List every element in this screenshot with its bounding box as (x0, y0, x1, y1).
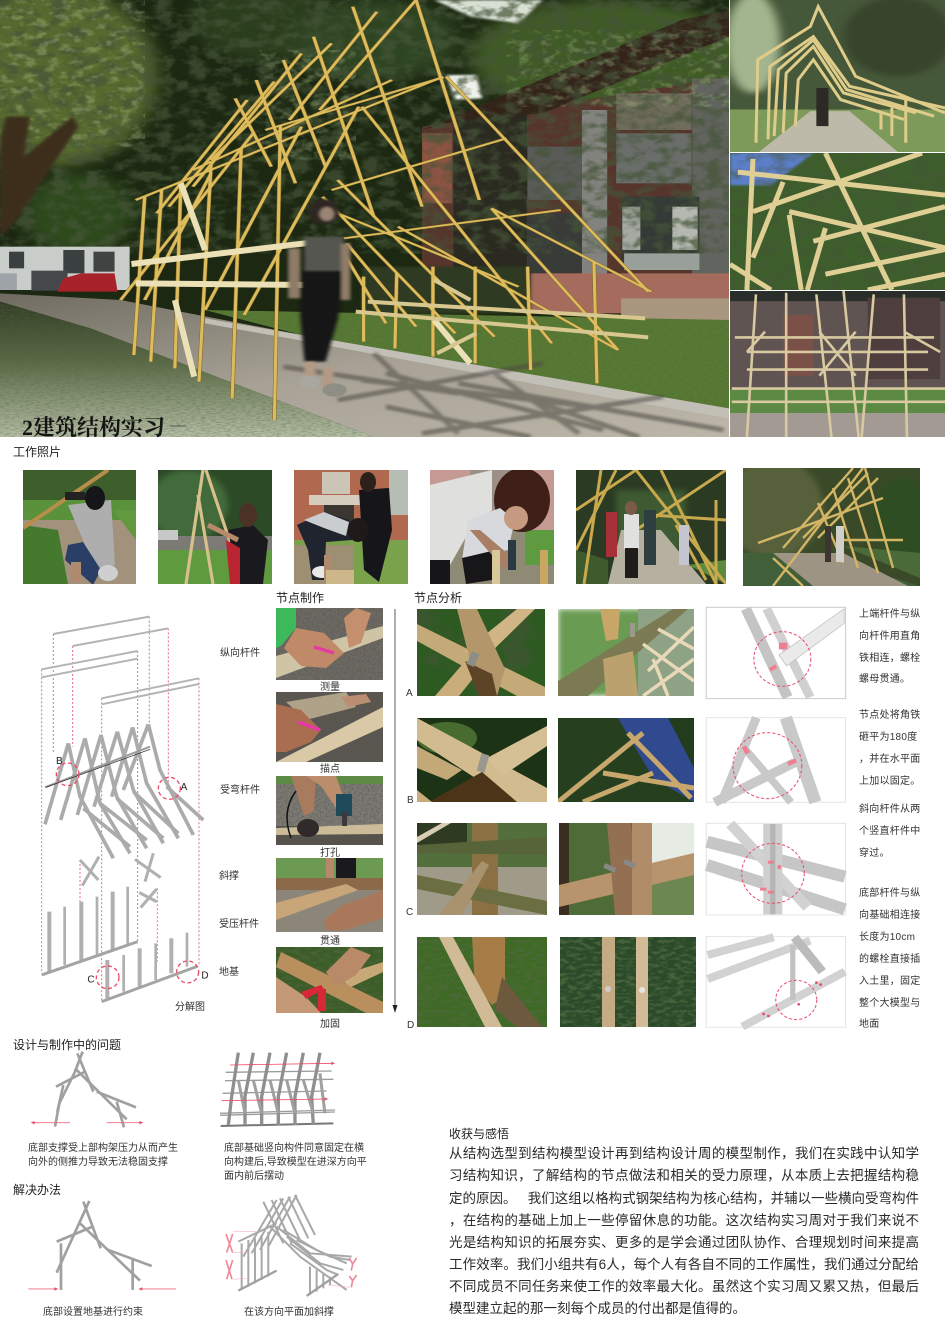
component labels: 地基 (219, 965, 239, 978)
reflections paragraph: 光是结构知识的拓展夯实、更多的是学会通过团队协作、合理规划时间来提高 (449, 1234, 919, 1250)
reflections paragraph: 从结构选型到结构模型设计再到结构设计周的模型制作，我们在实践中认知学 (449, 1145, 919, 1161)
reflections paragraph: 习结构知识，了解结构的节点做法和相关的受力原理，从本质上去把握结构稳 (449, 1167, 919, 1183)
problem diagram 2 (220, 1053, 335, 1126)
component labels: 受弯杆件 (220, 783, 260, 796)
caption: mark: 描点 (320, 762, 340, 775)
node notes: 斜向杆件从两 (859, 802, 920, 815)
heading: solutions: 解决办法 (13, 1182, 61, 1197)
node notes: 的螺栓直接插 (859, 952, 920, 965)
solution diagram 1 (28, 1201, 176, 1291)
reflections paragraph (449, 1145, 919, 1316)
solution text 1: 底部设置地基进行约束 (43, 1305, 143, 1318)
process arrow (392, 609, 398, 1013)
longitudinal bars (42, 617, 199, 704)
fabrication photo: drill (276, 776, 383, 845)
node D photo 2 (560, 937, 696, 1027)
left grass (0, 302, 374, 437)
problem text 2: 向构建后,导致模型在进深方向平 (224, 1155, 367, 1168)
photo: lattice from below (730, 153, 945, 290)
reflections paragraph: ，在结构的基础上加上一些停留休息的功能。这次结构实习周对于我们来说不 (449, 1212, 919, 1228)
caption: thread through: 贯通 (320, 935, 340, 947)
caption: measure: 测量 (320, 680, 340, 693)
component labels: 受压杆件 (219, 918, 259, 930)
work photo 6 (743, 468, 920, 586)
node C photo 2 (559, 823, 694, 915)
wood beams (121, 0, 651, 420)
exploded axonometric diagram: D (201, 971, 209, 982)
heading: problems: 设计与制作中的问题 (13, 1037, 121, 1052)
node A photo 1 (417, 609, 545, 696)
node notes: 整个大模型与 (859, 996, 920, 1009)
node notes: 底部杆件与纵 (859, 886, 920, 899)
node notes: 个竖直杆件中 (859, 824, 920, 837)
work photo 3 (294, 470, 408, 584)
component labels: 纵向杆件 (220, 646, 260, 659)
problem text 2: 底部基础竖向构件同意固定在横 (224, 1141, 364, 1154)
fabrication photo: measure (276, 608, 383, 680)
solution text 2: 在该方向平面加斜撑 (244, 1305, 334, 1318)
problem text 1 (28, 1141, 178, 1168)
node B drawing (706, 718, 846, 802)
heading: node fabrication: 节点制作 (276, 591, 324, 605)
node notes: 向基础相连接 (859, 908, 920, 921)
work photo 1 (23, 470, 136, 584)
node notes: 入土里，固定 (859, 974, 920, 987)
node letters: C (406, 907, 413, 918)
heading: node analysis: 节点分析 (414, 591, 462, 605)
solution diagram 2 (226, 1195, 357, 1296)
caption: drill: 打孔 (320, 846, 340, 859)
work photo 2 (158, 470, 272, 584)
reflections paragraph: 定的原因。 我们这组以格构式钢架结构为核心结构，并辅以一些横向受弯构件 (449, 1190, 919, 1206)
path (0, 293, 729, 437)
node notes: 砸平为180度 (859, 730, 917, 743)
heading: work photos: 工作照片 (13, 445, 61, 459)
bending rafters (45, 724, 203, 858)
fabrication photo: thread through (276, 858, 383, 932)
reflections paragraph: 模型建立起的那一刻每个成员的付出都是值得的。 (449, 1300, 746, 1316)
node notes: 节点处将角铁 (859, 708, 920, 721)
node notes: 长度为10cm (859, 930, 915, 943)
problem diagram 1 (31, 1052, 143, 1127)
reflections paragraph: 不同成员不同任务来使工作的效率最大化。虽然这个实习周又累又热，但最后 (449, 1278, 919, 1294)
compression posts (49, 892, 171, 998)
node B photo 1 (417, 718, 547, 802)
node letters: D (407, 1020, 414, 1031)
right grass (205, 310, 729, 408)
node notes (859, 607, 920, 1030)
problem text 2 (224, 1141, 367, 1182)
cast shadows (283, 353, 724, 437)
node C drawing (706, 823, 846, 915)
title: 2建筑结构实习 (22, 415, 165, 440)
node notes: 上端杆件与纵 (859, 607, 920, 620)
node letters (406, 688, 414, 1031)
heading: reflections: 收获与感悟 (449, 1126, 509, 1141)
node notes: 向杆件用直角 (859, 629, 920, 642)
photo: tunnel perspective (730, 0, 945, 152)
node notes: 螺母贯通。 (859, 673, 910, 685)
node letters: A (406, 688, 413, 699)
node notes: 穿过。 (859, 846, 890, 859)
node A photo 2 (558, 609, 694, 696)
exploded axonometric diagram: C (87, 975, 95, 986)
component labels: 斜撑 (219, 869, 239, 882)
exploded axonometric diagram (42, 617, 209, 1002)
node letters: B (407, 795, 414, 806)
fabrication photo: mark (276, 692, 383, 762)
red projection lines (42, 617, 199, 1000)
problem text 1: 向外的侧推力导致无法稳固支撑 (28, 1155, 168, 1168)
component labels: 分解图 (175, 1000, 205, 1013)
person (288, 199, 350, 397)
component labels (175, 646, 260, 1013)
node B photo 2 (558, 718, 694, 802)
node D photo 1 (417, 937, 547, 1027)
hero photo: wooden lattice tunnel (0, 0, 729, 437)
problem text 1: 底部支撑受上部构架压力从而产生 (28, 1141, 178, 1154)
exploded axonometric diagram: B (56, 756, 63, 767)
node notes: 铁相连，螺栓 (859, 651, 920, 664)
reflections paragraph: 工作效率。我们小组共有6人，每个人有各自不同的工作属性，我们通过分配给 (449, 1256, 919, 1272)
node notes: 地面 (859, 1017, 880, 1030)
work photo 4 (430, 470, 554, 584)
node markers (56, 763, 199, 989)
work photo 5 (576, 470, 726, 584)
node notes: ，并在水平面 (859, 752, 920, 765)
caption: reinforce: 加固 (320, 1018, 340, 1030)
photo: front elevation (730, 291, 945, 437)
problem text 2: 面内前后摆动 (224, 1169, 284, 1182)
node D drawing (706, 937, 846, 1027)
exploded axonometric diagram: A (181, 782, 188, 793)
node notes: 上加以固定。 (859, 774, 920, 787)
foundation sills (42, 942, 197, 1002)
fabrication photo: reinforce (276, 947, 383, 1013)
diagonal braces (80, 853, 161, 908)
node A drawing (706, 607, 846, 699)
node C photo 1 (417, 823, 547, 915)
